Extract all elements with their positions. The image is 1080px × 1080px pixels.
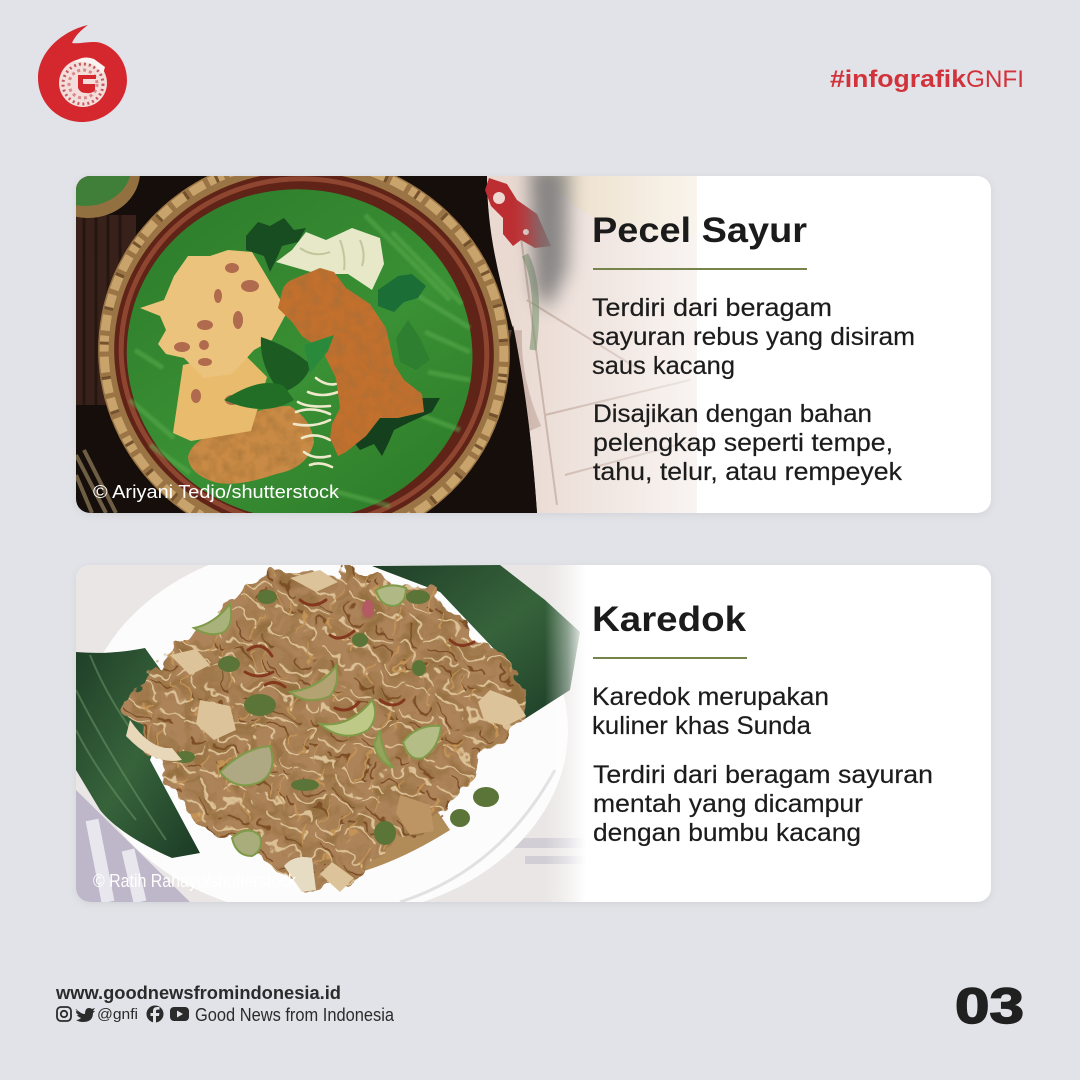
icon: twitter [76,1008,95,1022]
caption: © Ratih Rahayu/shutterstock [93,871,297,891]
wood rim [114,176,494,513]
plate group [98,176,510,513]
tofu [173,351,267,441]
pale cabbage pieces [126,570,526,892]
photo: karedok [76,565,580,902]
footer: website and social [55,983,395,1025]
dark gap beside tray [507,325,537,513]
basil leaves [261,337,311,393]
text block [592,294,915,486]
icon: facebook [146,1006,164,1023]
greens [246,218,440,456]
photo: pecel sayur [76,176,697,513]
text block: Disajikan dengan bahan [593,400,872,428]
heading: Karedok [592,600,747,639]
page number: 03 [955,978,1024,1034]
peanut sauce [278,268,424,456]
red flower [485,178,551,248]
banana leaf right [372,565,580,722]
caption: © Ariyani Tedjo/shutterstock [93,482,340,502]
panel: Karedok [76,542,991,918]
cabbage [276,228,384,290]
cloth [487,176,697,513]
banana leaf left [76,648,200,858]
sprouts [294,378,338,467]
tempeh [188,406,314,484]
banana leaf [126,189,472,513]
text block: saus kacang [592,352,735,380]
striped cloth [76,790,190,902]
text block: dengan bumbu kacang [593,819,861,847]
handle: @gnfi [97,1006,138,1023]
green bits [175,590,499,845]
hashtag: #infografik [830,66,967,93]
fade to white [545,565,586,902]
text block: pelengkap seperti tempe, [593,429,893,457]
text block: tahu, telur, atau rempeyek [593,458,903,486]
underline [593,657,747,659]
cucumber slices [194,585,441,856]
text block: mentah yang dicampur [593,790,863,818]
underline [593,268,807,270]
panel: Pecel Sayur [76,176,991,514]
icon: youtube [170,1007,189,1021]
text block: Terdiri dari beragam [592,294,832,322]
shadow across cloth [530,166,570,310]
text block [592,683,933,847]
small basket top-left [76,176,140,218]
fried shallots [245,600,474,710]
hashtag: GNFI [966,66,1024,93]
plate [104,565,568,902]
heading: Pecel Sayur [592,211,807,250]
logo [38,25,127,122]
hashtag [830,66,1024,93]
page name: Good News from Indonesia [195,1005,395,1025]
rempeyek [140,250,286,378]
text block: sayuran rebus yang disiram [592,323,915,351]
text block: Karedok merupakan [592,683,829,711]
woven tray [98,176,510,513]
sauce pool [230,812,450,871]
website: www.goodnewsfromindonesia.id [55,983,341,1003]
text block: kuliner khas Sunda [592,712,811,740]
icon: instagram [57,1007,71,1021]
text block: Terdiri dari beragam sayuran [593,761,933,789]
salad mound [125,571,526,890]
bowl behind [568,176,652,234]
